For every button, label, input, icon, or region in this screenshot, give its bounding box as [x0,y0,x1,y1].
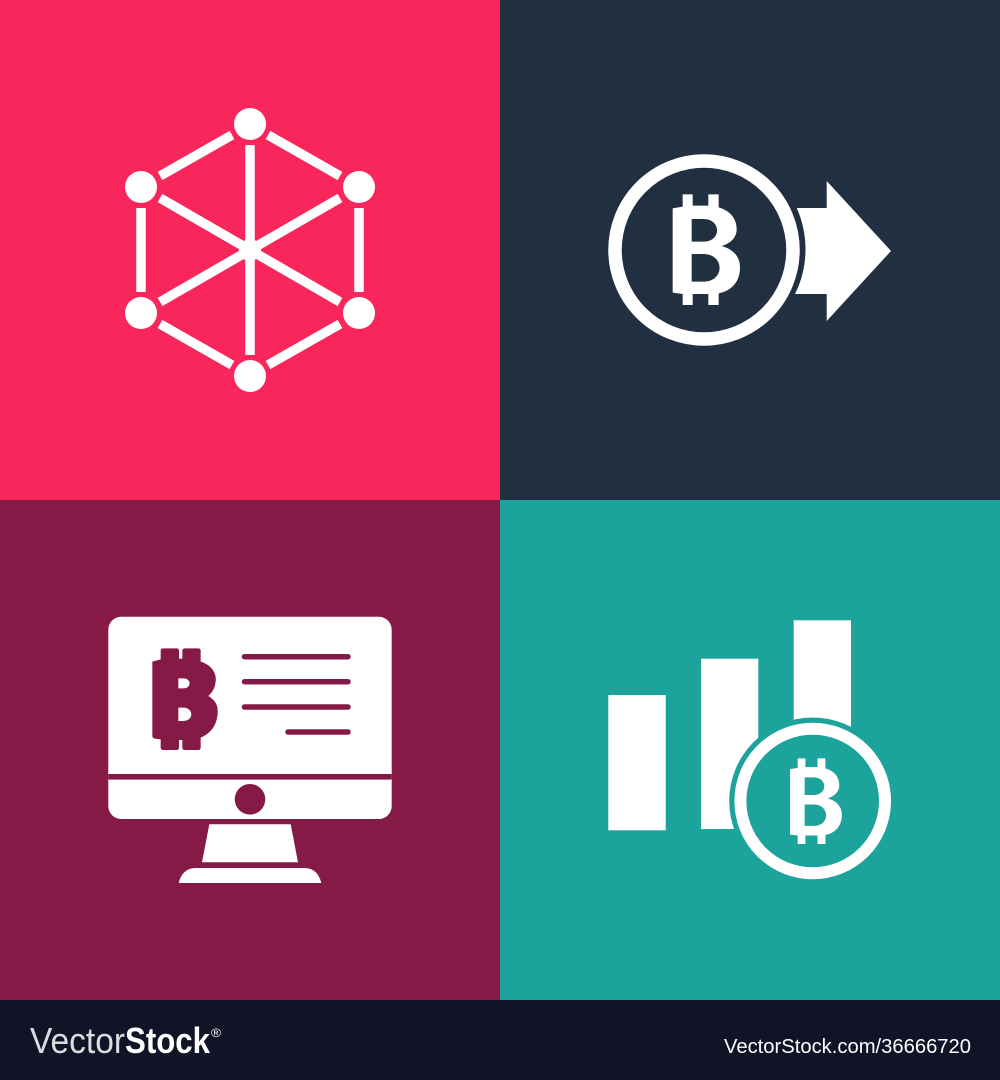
monitor stand [202,824,298,862]
monitor divider [108,774,392,780]
coin cutout [729,718,896,884]
panel: blockchain network [0,0,500,500]
icon: bitcoin coin [740,729,885,873]
monitor screen [108,617,392,819]
footer bar [0,1000,1000,1080]
icon: desktop monitor [108,617,392,883]
logo: VectorStock [30,1020,221,1061]
bar chart [608,620,851,830]
bitcoin symbol on screen [152,648,218,750]
monitor base [179,868,321,883]
icon: hexagon network [125,108,375,392]
image id text: VectorStock.com/36666720 [724,1036,971,1058]
panel: bitcoin on computer [0,500,500,1000]
monitor power button [235,784,265,815]
text lines on screen [244,657,348,732]
icon: bitcoin coin [615,161,793,339]
icon: arrow pointing right [795,181,891,321]
logo: VectorStock: ® [211,1026,221,1040]
logo: VectorStock: Vector [30,1020,125,1061]
panel: bitcoin bar chart [500,500,1000,1000]
panel: bitcoin transfer [500,0,1000,500]
logo: VectorStock: Stock [125,1020,211,1061]
